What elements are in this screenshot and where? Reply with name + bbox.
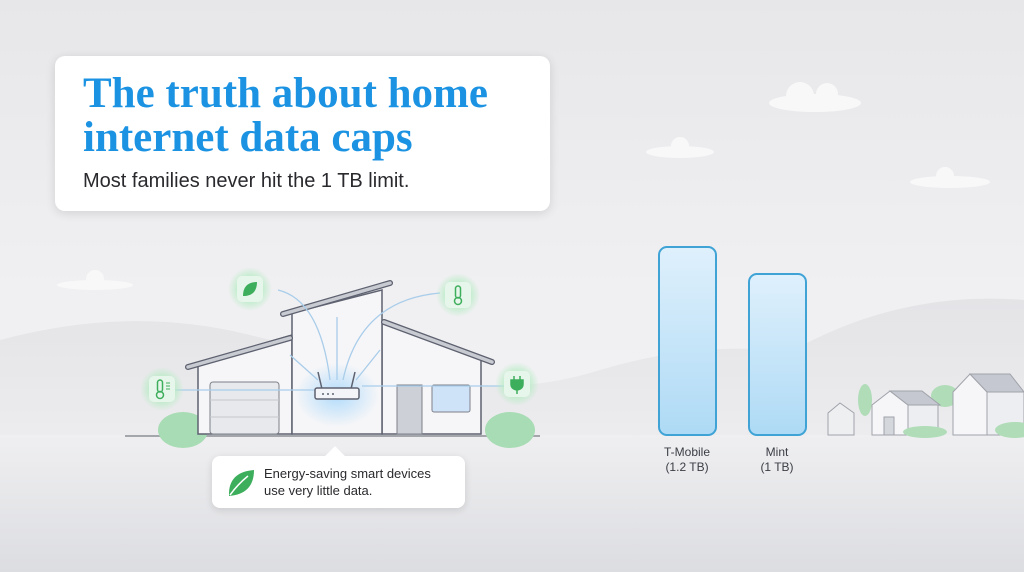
heading: The truth about home (83, 70, 488, 117)
ground (0, 435, 1024, 572)
icon: thermometer device (436, 273, 480, 317)
clouds (57, 82, 990, 290)
icon: thermostat device (140, 367, 184, 411)
icon: leaf (229, 470, 254, 496)
icon: leaf device (228, 267, 272, 311)
heading: internet data caps (83, 114, 413, 161)
bar: Mint (749, 274, 806, 435)
label: T-Mobile (664, 445, 710, 474)
title card (55, 56, 550, 211)
label: T-Mobile: (1.2 TB) (665, 460, 709, 474)
icon: plug device (495, 362, 539, 406)
callout (212, 456, 465, 508)
village houses (828, 374, 1024, 438)
hills (0, 299, 1024, 435)
label: T-Mobile: T-Mobile (664, 445, 710, 459)
label: Mint (760, 445, 794, 474)
bar: T-Mobile (659, 247, 716, 435)
callout text: use very little data. (264, 483, 372, 498)
subtitle: Most families never hit the 1 TB limit. (83, 170, 409, 192)
label: Mint: Mint (766, 445, 788, 459)
callout text: Energy-saving smart devices (264, 466, 431, 481)
label: Mint: (1 TB) (760, 460, 794, 474)
callout text (264, 466, 431, 498)
heading (83, 70, 488, 161)
